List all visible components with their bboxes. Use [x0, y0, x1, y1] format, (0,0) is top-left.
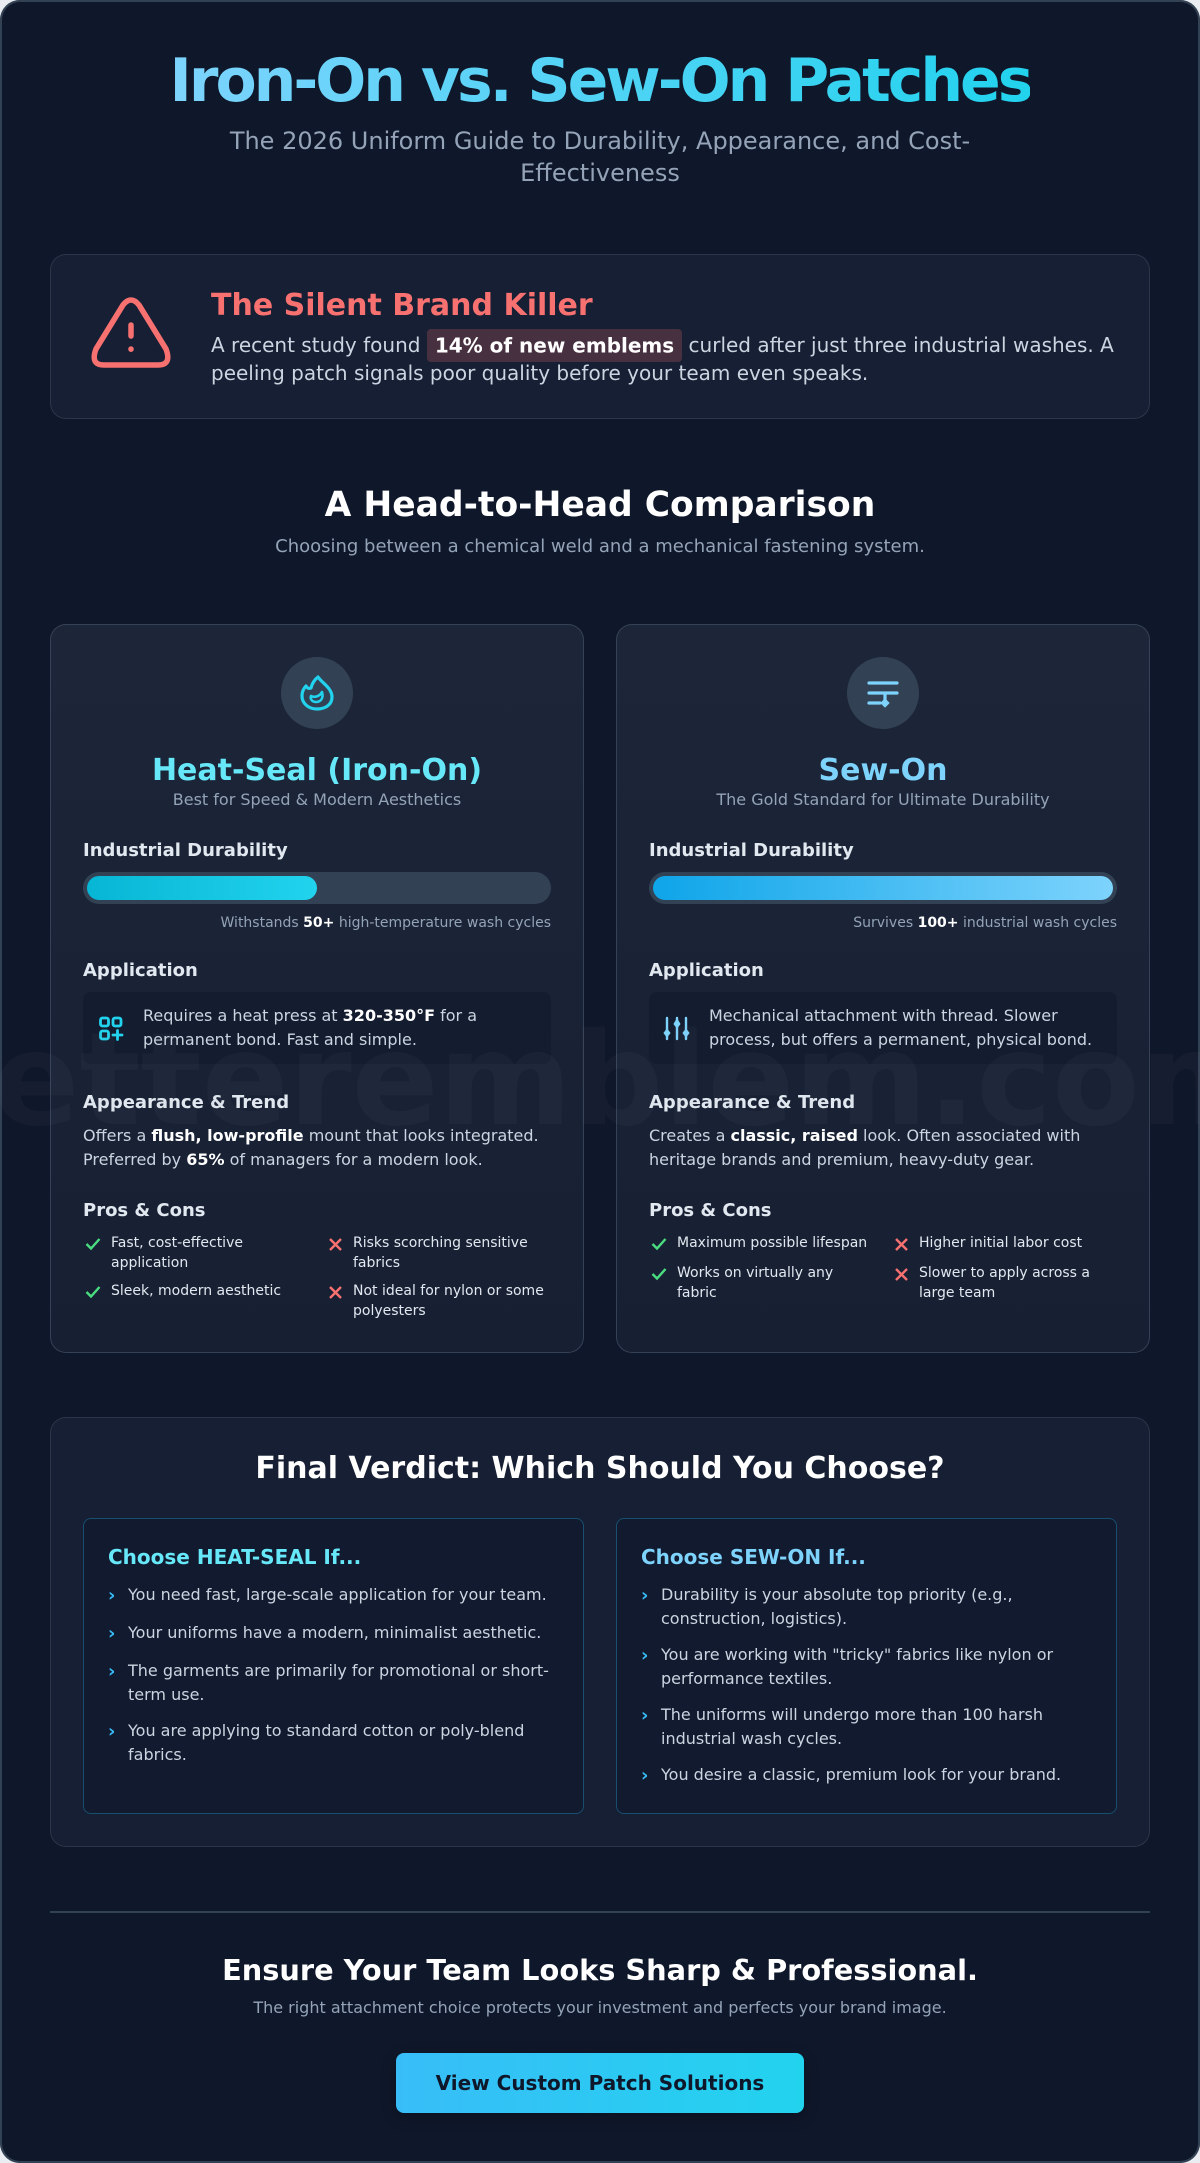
- durability caption: Withstands 50+ high-temperature wash cycles: [221, 915, 551, 931]
- item: ›: [641, 1644, 648, 1666]
- icon: thread lines: [847, 657, 919, 729]
- heading: Heat-Seal (Iron-On): [152, 752, 482, 788]
- verdict box: sew-on: [616, 1518, 1117, 1814]
- box heading: Choose HEAT-SEAL If...: [108, 1544, 361, 1568]
- con 2: large team: [919, 1285, 995, 1301]
- icon: flame: [281, 657, 353, 729]
- application text: permanent bond. Fast and simple.: [143, 1030, 417, 1048]
- section subheading: Choosing between a chemical weld and a mechanical fastening system.: [275, 536, 925, 556]
- con 2: Not ideal for nylon or some: [353, 1283, 544, 1299]
- alert body: [211, 329, 1114, 385]
- durability label: Industrial Durability: [649, 840, 854, 860]
- alert heading: The Silent Brand Killer: [211, 288, 593, 322]
- button: [396, 2053, 804, 2113]
- item: [108, 1660, 549, 1704]
- pro 1: application: [111, 1255, 188, 1271]
- box heading: Choose SEW-ON If...: [641, 1544, 866, 1568]
- pro 1: Fast, cost-effective: [111, 1235, 243, 1251]
- pro 1: Maximum possible lifespan: [677, 1235, 867, 1251]
- application text: [143, 1006, 477, 1048]
- pros and cons label: Pros & Cons: [649, 1200, 771, 1221]
- durability label: Industrial Durability: [83, 840, 288, 860]
- title: Iron-On vs. Sew-On Patches: [170, 46, 1030, 116]
- pro 1: [86, 1235, 243, 1271]
- item: ›: [108, 1584, 115, 1606]
- pro 2: fabric: [677, 1285, 717, 1301]
- con 1: [329, 1235, 528, 1271]
- icon: apps: [99, 1016, 124, 1041]
- appearance text: Offers a flush, low-profile mount that looks integrated.: [83, 1126, 539, 1144]
- pro 2: Works on virtually any: [677, 1265, 833, 1281]
- item: ›: [108, 1622, 115, 1644]
- icon: sliders: [664, 1016, 690, 1040]
- item: [641, 1644, 1054, 1688]
- subheading: Best for Speed & Modern Aesthetics: [173, 790, 461, 809]
- item: Durability is your absolute top priority (e.g.,: [661, 1584, 1013, 1604]
- application text: Mechanical attachment with thread. Slower: [709, 1006, 1058, 1024]
- appearance label: Appearance & Trend: [83, 1092, 289, 1112]
- application text: Requires a heat press at 320-350°F for a: [143, 1006, 477, 1024]
- item: [108, 1720, 524, 1764]
- button: View Custom Patch Solutions: [436, 2071, 764, 2095]
- item: You are working with "tricky" fabrics like nylon or: [661, 1644, 1053, 1664]
- con 1: Higher initial labor cost: [919, 1235, 1082, 1251]
- application text: [709, 1006, 1092, 1048]
- application label: Application: [649, 960, 764, 980]
- item: ›: [641, 1764, 648, 1786]
- item: [641, 1584, 1013, 1628]
- item: term use.: [128, 1684, 204, 1704]
- item: [641, 1704, 1043, 1748]
- closing text: The right attachment choice protects your investment and perfects your brand image.: [253, 1998, 947, 2017]
- section heading: A Head-to-Head Comparison: [325, 485, 875, 525]
- appearance text: [83, 1126, 539, 1168]
- con 1: fabrics: [353, 1255, 400, 1271]
- item: You desire a classic, premium look for your brand.: [661, 1764, 1061, 1784]
- item: ›: [641, 1584, 648, 1606]
- item: The uniforms will undergo more than 100 harsh: [661, 1704, 1043, 1724]
- closing heading: Ensure Your Team Looks Sharp & Professional.: [222, 1953, 978, 1987]
- application label: Application: [83, 960, 198, 980]
- subtitle: Effectiveness: [520, 159, 680, 187]
- durability bar: 50%: [83, 872, 551, 904]
- item: industrial wash cycles.: [661, 1728, 842, 1748]
- verdict heading: Final Verdict: Which Should You Choose?: [255, 1450, 945, 1486]
- application box: [649, 992, 1117, 1064]
- item: construction, logistics).: [661, 1608, 847, 1628]
- item: You are applying to standard cotton or poly-blend: [128, 1720, 524, 1740]
- application box: [83, 992, 551, 1064]
- alert body: A recent study found 14% of new emblems curled after just three industrial washes. A: [211, 333, 1114, 357]
- appearance text: Preferred by 65% of managers for a modern look.: [83, 1150, 483, 1168]
- durability caption: Survives 100+ industrial wash cycles: [853, 915, 1117, 931]
- item: ›: [108, 1660, 115, 1682]
- panel: final verdict: [50, 1417, 1150, 1847]
- panel: heat-seal card: [50, 624, 584, 1353]
- item: fabrics.: [128, 1744, 187, 1764]
- application text: process, but offers a permanent, physical bond.: [709, 1030, 1092, 1048]
- verdict box: heat-seal: [83, 1518, 584, 1814]
- appearance text: Creates a classic, raised look. Often associated with: [649, 1126, 1080, 1144]
- con 1: Risks scorching sensitive: [353, 1235, 528, 1251]
- item: Your uniforms have a modern, minimalist aesthetic.: [128, 1622, 541, 1642]
- appearance text: heritage brands and premium, heavy-duty gear.: [649, 1150, 1034, 1168]
- con 2: [895, 1265, 1090, 1301]
- durability bar: 100%: [649, 872, 1117, 904]
- pros and cons label: Pros & Cons: [83, 1200, 205, 1221]
- pro 2: Sleek, modern aesthetic: [111, 1283, 281, 1299]
- panel: sew-on card: [616, 624, 1150, 1353]
- item: The garments are primarily for promotional or short-: [128, 1660, 549, 1680]
- heading: Sew-On: [818, 752, 947, 788]
- panel: alert: [50, 254, 1150, 419]
- appearance label: Appearance & Trend: [649, 1092, 855, 1112]
- item: ›: [641, 1704, 648, 1726]
- con 2: polyesters: [353, 1303, 426, 1319]
- alert body: peeling patch signals poor quality before your team even speaks.: [211, 361, 868, 385]
- pro 2: [652, 1265, 833, 1301]
- icon: warning triangle: [91, 297, 171, 368]
- item: You need fast, large-scale application for your team.: [128, 1584, 547, 1604]
- item: ›: [108, 1720, 115, 1742]
- appearance text: [649, 1126, 1080, 1168]
- subheading: The Gold Standard for Ultimate Durability: [716, 790, 1050, 809]
- item: performance textiles.: [661, 1668, 832, 1688]
- subtitle: [230, 127, 970, 187]
- con 2: Slower to apply across a: [919, 1265, 1090, 1281]
- subtitle: The 2026 Uniform Guide to Durability, Appearance, and Cost-: [230, 127, 970, 155]
- con 2: [329, 1283, 544, 1319]
